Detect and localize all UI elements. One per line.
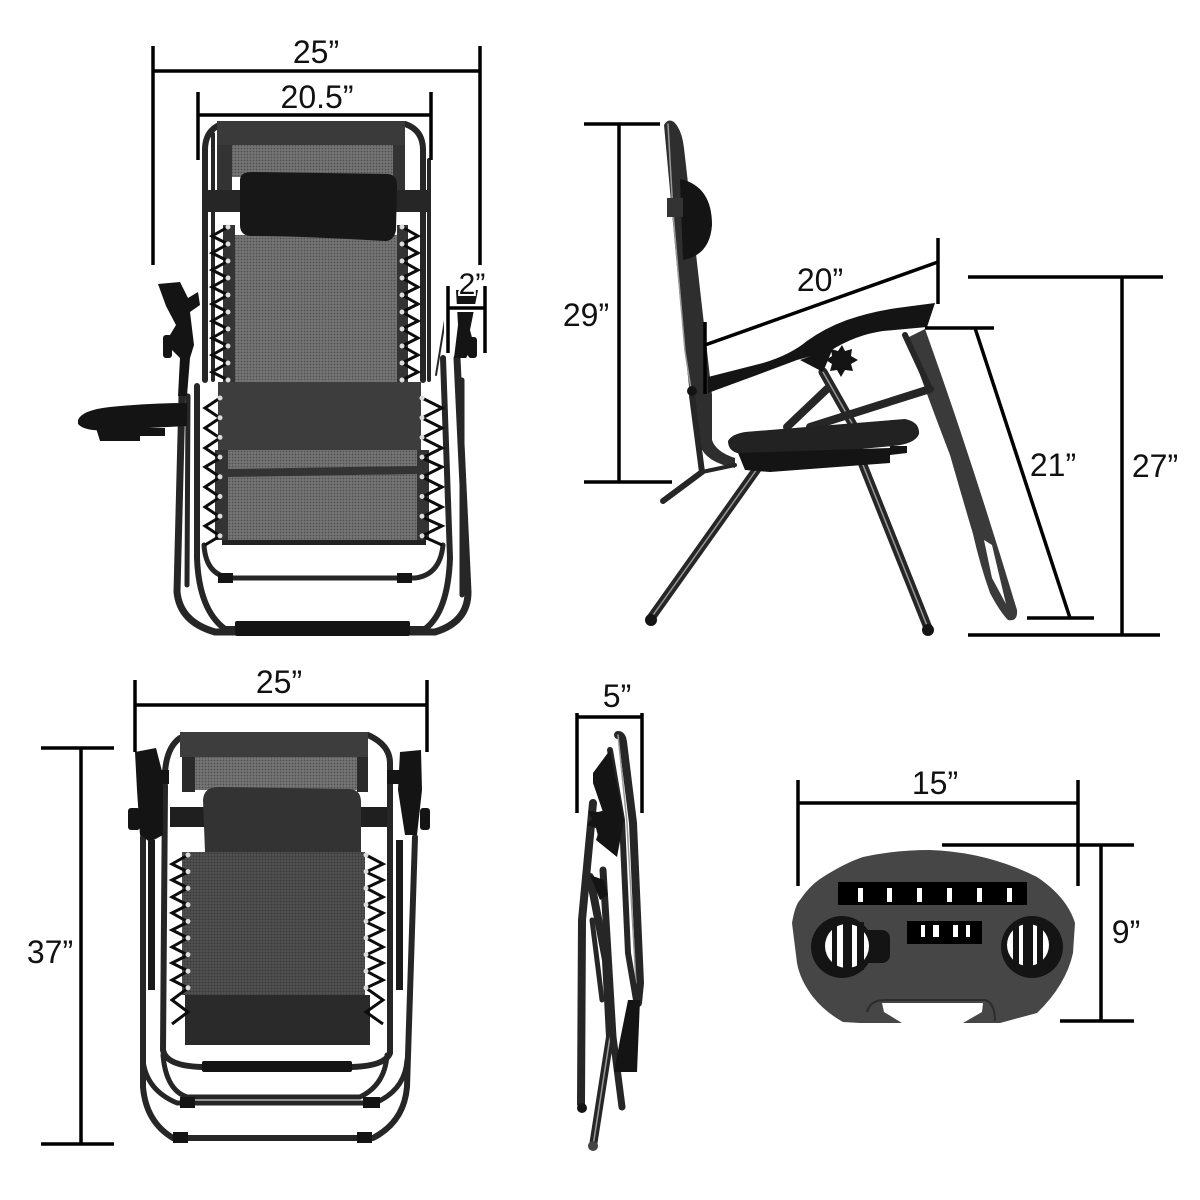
- dimension: tray width 15 in: 15”: [912, 765, 958, 801]
- lacing cords and eyelets: [205, 227, 442, 545]
- rear loop leg: [907, 329, 1017, 620]
- dimension: arm width 2 in: 2”: [459, 268, 485, 301]
- chair: front view, open: [78, 121, 478, 636]
- dimension: seat width 20.5 in: 20.5”: [281, 79, 353, 115]
- dimension: arm to ground 21 in: [925, 328, 1094, 618]
- dimension: total height 27 in: [968, 277, 1178, 635]
- headrest strap and pillow: [202, 172, 430, 241]
- dimension: back height 29 in: 29”: [563, 297, 609, 333]
- dimension: total height 27 in: 27”: [1132, 448, 1178, 484]
- fabric: [170, 732, 387, 1045]
- mesh fabric: [215, 121, 429, 545]
- front legs: [651, 335, 930, 628]
- frame loops: [143, 735, 415, 1143]
- leg feet: [645, 614, 934, 636]
- footrest crossbar: [204, 545, 443, 583]
- dimension: tray depth 9 in: [942, 845, 1140, 1021]
- chair: front view, folded: [128, 732, 430, 1143]
- dimension: folded depth 5 in: [577, 678, 642, 813]
- lacing: [172, 855, 383, 1024]
- middle slot: [907, 921, 982, 944]
- tray body: [792, 850, 1075, 1023]
- dimension: tray width 15 in: [798, 765, 1078, 886]
- pillow: [203, 787, 361, 852]
- dimension: folded width 25 in: [135, 664, 427, 752]
- dimension: back height 29 in: [563, 124, 672, 482]
- tray: side table top view: [792, 850, 1075, 1023]
- top slot: [838, 882, 1027, 905]
- dimension: top width 25 in: 25”: [293, 34, 339, 70]
- dimension: folded depth 5 in: 5”: [603, 678, 631, 714]
- side table, edge on: [78, 403, 187, 441]
- side table, side view: [728, 419, 919, 472]
- chair: side view, folded: [577, 735, 640, 1151]
- headrest, side view: [667, 179, 712, 260]
- dimension: folded height 37 in: 37”: [27, 934, 73, 970]
- right cup holder: [1001, 916, 1063, 978]
- dimension: top width 25 in: [153, 34, 480, 265]
- backrest tube and footrest: [663, 121, 735, 501]
- right arm mechanism: [436, 290, 478, 375]
- left arm mechanism: [158, 282, 200, 396]
- chair: side view, open: [645, 121, 1017, 636]
- dimension: arm to ground 21 in: 21”: [1030, 447, 1076, 483]
- dimension: arm width 2 in: [448, 268, 485, 353]
- dimension: folded width 25 in: 25”: [256, 664, 302, 700]
- folded arm and brackets: [587, 750, 640, 1072]
- tray notch recess: [867, 1000, 995, 1021]
- folded tubes: [577, 735, 640, 1151]
- dimension: tray depth 9 in: 9”: [1112, 914, 1140, 950]
- dimension: arm length 20 in: [705, 238, 938, 394]
- left cup holder: [811, 916, 890, 978]
- folded armrests: [128, 748, 430, 990]
- dimension: folded height 37 in: [27, 748, 114, 1144]
- lower frame tubes: [177, 358, 468, 636]
- dimension: seat width 20.5 in: [198, 79, 431, 160]
- upper backrest frame: [205, 124, 429, 380]
- dimension: arm length 20 in: 20”: [797, 262, 843, 298]
- armrest, side view: [687, 303, 935, 396]
